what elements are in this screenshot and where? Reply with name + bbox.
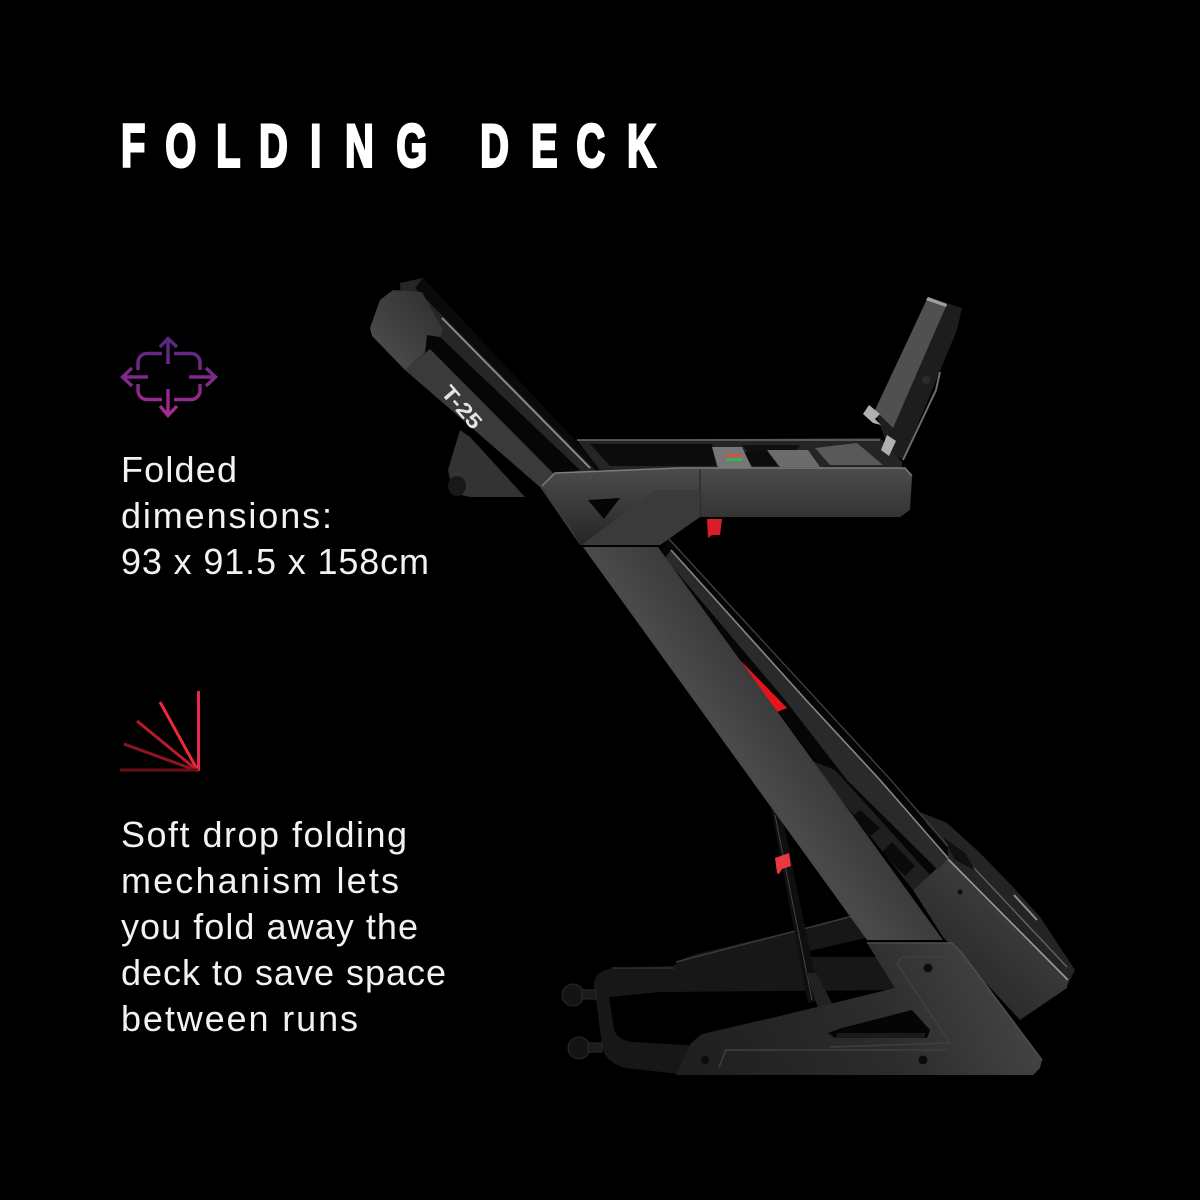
folded deck lower section — [660, 538, 948, 890]
treadmill illustration — [370, 278, 1075, 1075]
castor wheels — [562, 984, 602, 1059]
left handrail wheel — [448, 476, 466, 496]
icon: soft drop fan lines — [120, 691, 198, 771]
console tray back — [577, 438, 902, 470]
text: folded dimensions: Folded — [121, 449, 237, 490]
rear base frame — [594, 916, 900, 1074]
text: folded dimensions: dimensions: — [121, 495, 332, 536]
text: soft drop description: you fold away the — [121, 906, 418, 947]
model label: T-25 — [436, 381, 487, 434]
text: folded dimensions: 93 x 91.5 x 158cm — [121, 541, 429, 582]
text: soft drop description: Soft drop folding — [121, 814, 407, 855]
red safety key — [707, 519, 722, 538]
main upright post — [583, 547, 943, 940]
text: soft drop description — [121, 814, 446, 1039]
console crossbar — [542, 468, 912, 545]
motor shroud — [448, 430, 525, 497]
red belt marker — [740, 660, 787, 712]
red strut clip — [775, 853, 791, 874]
text: soft drop description: between runs — [121, 998, 358, 1039]
console button panel — [712, 447, 752, 468]
end cap and side rail — [370, 278, 603, 545]
icon: folded dimensions arrows — [122, 338, 216, 416]
rear roller cover — [920, 812, 1075, 984]
base side plate — [676, 943, 1042, 1075]
console pads — [767, 443, 883, 467]
folding strut — [771, 806, 832, 1008]
text: soft drop description: deck to save space — [121, 952, 446, 993]
text: folded dimensions — [121, 449, 429, 582]
title: FOLDING DECK — [121, 112, 656, 179]
text: soft drop description: mechanism lets — [121, 860, 399, 901]
tablet holder — [863, 297, 962, 460]
rear motor housing — [913, 837, 1068, 1020]
